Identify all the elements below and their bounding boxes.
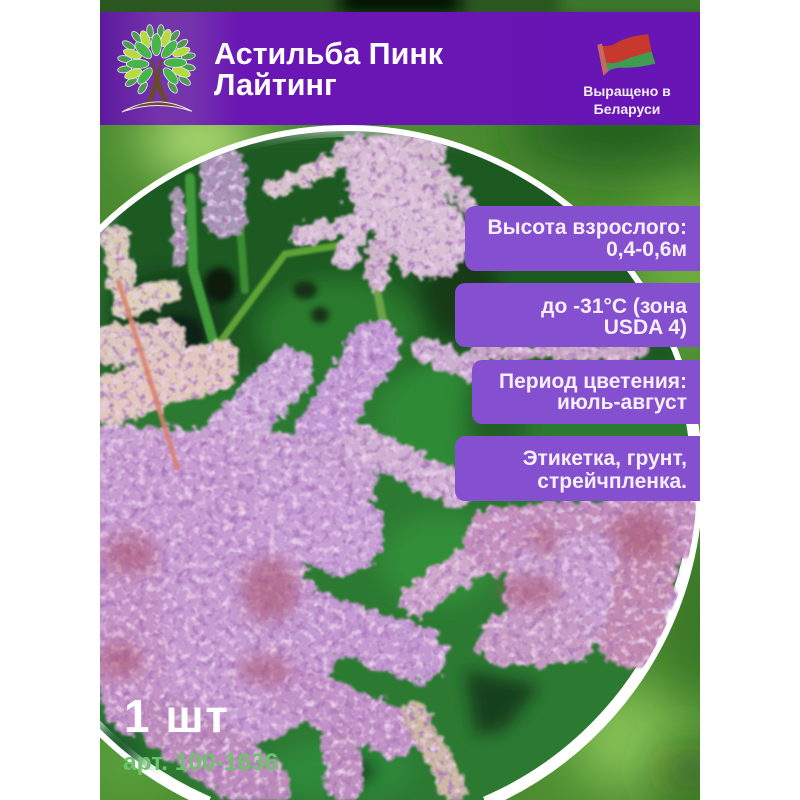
stems xyxy=(184,172,388,344)
info tag: flowering: июль-август xyxy=(557,391,687,414)
info tag: package: стрейчпленка. xyxy=(537,470,687,493)
title: Лайтинг xyxy=(214,68,337,102)
info tag: flowering: Период цветения: xyxy=(499,370,687,393)
info tag: height xyxy=(465,206,700,271)
text: grown in Belarus: Выращено в xyxy=(583,82,671,98)
product photo with circular frame xyxy=(100,0,700,800)
dark foliage xyxy=(85,130,700,798)
article number: арт. 100-1636 xyxy=(123,749,278,776)
info tag: height: Высота взрослого: xyxy=(488,216,687,239)
info tag: hardiness: до -31°C (зона xyxy=(541,295,687,318)
info tag: height: 0,4-0,6м xyxy=(606,238,687,261)
tree trunk xyxy=(146,59,168,104)
text: grown in Belarus: Беларуси xyxy=(594,100,660,116)
flower plumes xyxy=(110,150,670,790)
info tag: package xyxy=(455,436,700,501)
white circle frame xyxy=(100,125,700,800)
icon: tree logo xyxy=(117,24,196,112)
title: Астильба Пинк xyxy=(214,37,443,71)
info tag: hardiness: USDA 4) xyxy=(604,316,687,339)
blurred green background xyxy=(100,0,700,800)
icon: Belarus flag xyxy=(597,34,656,76)
info tag: hardiness xyxy=(455,283,700,347)
dark red flower centres xyxy=(98,511,670,684)
info tag: flowering xyxy=(472,360,700,424)
text: grown in Belarus xyxy=(583,82,671,117)
title xyxy=(214,37,443,102)
info tag: package: Этикетка, грунт, xyxy=(523,447,687,470)
header band xyxy=(100,12,700,125)
photo of pink astilbe flowers xyxy=(85,130,700,798)
flower stalk xyxy=(118,280,178,470)
quantity label: 1 шт xyxy=(124,690,229,742)
